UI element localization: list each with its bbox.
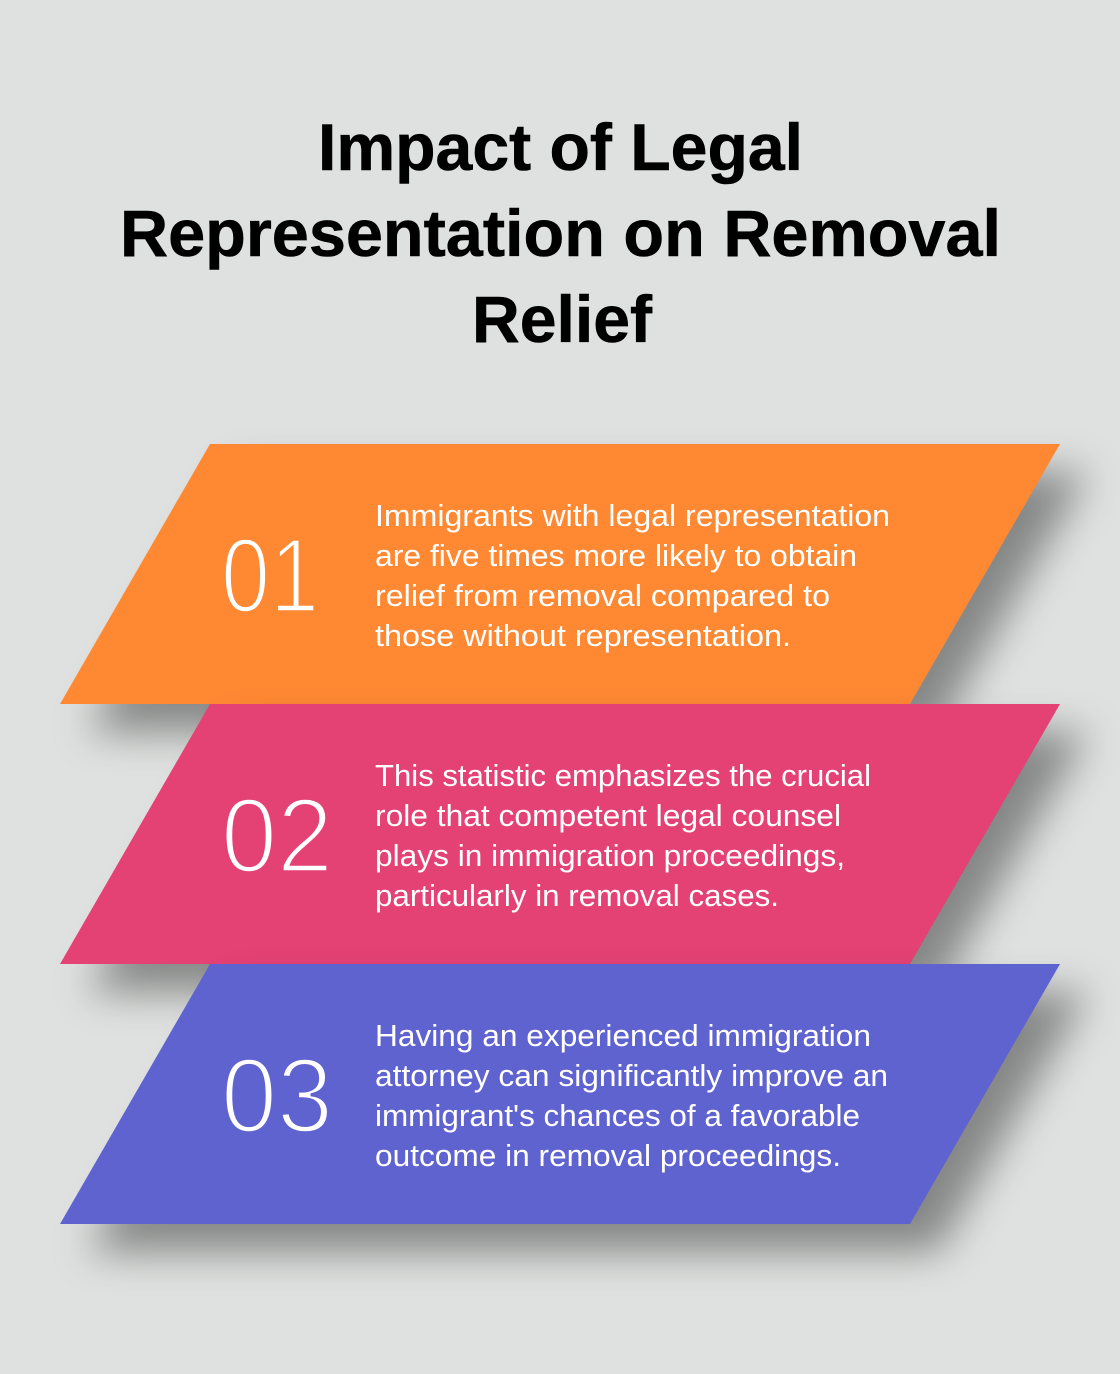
step 01 text: Immigrants with legal representation: [375, 498, 890, 533]
title: [120, 110, 1001, 356]
step 03 text: [375, 1018, 888, 1173]
title: Relief: [472, 282, 653, 356]
step 03 text: immigrant's chances of a favorable: [375, 1098, 860, 1133]
step 03 text: Having an experienced immigration: [375, 1018, 871, 1053]
panel: step 01: [60, 444, 1088, 732]
step 03 card: [60, 964, 1060, 1224]
step 01 number: 01: [221, 517, 319, 635]
step 03 text: attorney can significantly improve an: [375, 1058, 888, 1093]
title: Representation on Removal: [120, 196, 1001, 270]
step 02 text: This statistic emphasizes the crucial: [375, 758, 871, 793]
step 01 text: those without representation.: [375, 618, 791, 653]
step 02 text: role that competent legal counsel: [375, 798, 841, 833]
step 01 text: [375, 498, 890, 653]
step 03 text: outcome in removal proceedings.: [375, 1138, 841, 1173]
step 02 card: [60, 704, 1060, 964]
step 01 card: [60, 444, 1060, 704]
step 02 text: particularly in removal cases.: [375, 878, 779, 913]
step 02 text: [375, 758, 871, 913]
step 02 number: 02: [221, 777, 333, 895]
title: Impact of Legal: [318, 110, 803, 184]
panel: step 03: [60, 964, 1088, 1252]
step 01 text: relief from removal compared to: [375, 578, 830, 613]
step 01 text: are five times more likely to obtain: [375, 538, 857, 573]
step 03 number: 03: [221, 1037, 333, 1155]
step 02 text: plays in immigration proceedings,: [375, 838, 845, 873]
panel: step 02: [60, 704, 1088, 992]
